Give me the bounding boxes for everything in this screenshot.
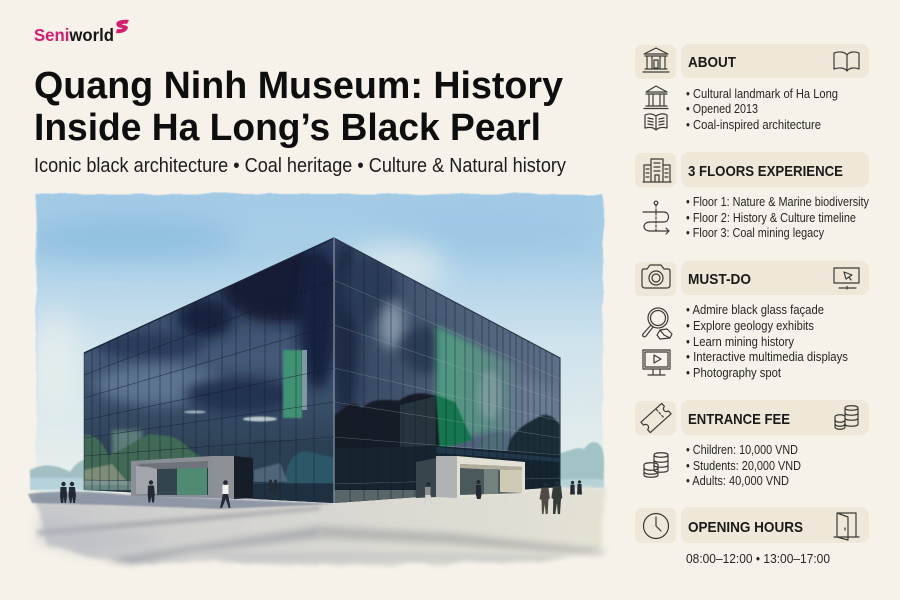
building shadow on left plaza <box>28 491 334 509</box>
floors bullets: • Floor 2: History & Culture timeline <box>686 211 856 225</box>
plaza strip three <box>320 526 607 555</box>
about header: ABOUT <box>688 54 736 71</box>
fee bullets: • Children: 10,000 VND <box>686 443 798 457</box>
panel: entrance fee <box>635 400 869 488</box>
people on the plaza <box>60 480 582 514</box>
about icon tile: museum <box>635 45 676 79</box>
must-do bullets: • Interactive multimedia displays <box>686 350 848 364</box>
must-do header: MUST-DO <box>688 271 751 288</box>
hours header: OPENING HOURS <box>688 519 803 536</box>
panel: must-do <box>635 261 869 380</box>
subtitle: Iconic black architecture • Coal heritage • Culture & Natural history <box>34 155 566 177</box>
plaza ground <box>28 488 607 566</box>
distant hills and water <box>30 442 604 490</box>
title: Inside Ha Long’s Black Pearl <box>34 107 541 149</box>
title: Quang Ninh Museum: History <box>34 65 563 107</box>
must-do bullets: • Explore geology exhibits <box>686 319 814 333</box>
hours icon tile: clock <box>635 508 676 543</box>
floors header: 3 FLOORS EXPERIENCE <box>688 163 843 180</box>
icon: open book <box>645 114 667 130</box>
floors bullets: • Floor 1: Nature & Marine biodiversity <box>686 195 870 209</box>
about bullets <box>686 87 838 132</box>
sky wash <box>20 194 603 494</box>
left entrance pavilion <box>131 456 253 499</box>
corner frame <box>84 238 334 353</box>
building right facade <box>331 238 560 505</box>
icon: coin stacks <box>644 453 668 477</box>
must-do bullets: • Photography spot <box>686 366 781 380</box>
icon: magnifier over rock <box>643 308 672 339</box>
floors bullets <box>686 195 870 240</box>
hours text: 08:00–12:00 • 13:00–17:00 <box>686 551 830 566</box>
about bullets: • Opened 2013 <box>686 102 758 116</box>
panel: 3 floors experience <box>635 152 870 240</box>
fee icon tile: ticket <box>635 401 676 435</box>
logo: Seniworld <box>34 20 129 45</box>
watercolor illustration: museum <box>20 194 607 566</box>
floors bullets: • Floor 3: Coal mining legacy <box>686 226 825 240</box>
fee bullets: • Adults: 40,000 VND <box>686 474 789 488</box>
panel: opening hours <box>635 507 869 566</box>
must-do bullets <box>686 303 848 380</box>
must-do bullets: • Admire black glass façade <box>686 303 824 317</box>
floors icon tile: building <box>635 153 676 187</box>
fee header <box>681 400 869 435</box>
icon: multimedia monitor <box>643 350 670 375</box>
about bullets: • Cultural landmark of Ha Long <box>686 87 838 101</box>
plaza strip one <box>37 506 320 536</box>
must-do header <box>681 261 869 295</box>
plaza strip two <box>100 526 320 565</box>
fee bullets <box>686 443 801 488</box>
must-do icon tile: camera <box>635 262 676 296</box>
floors header <box>681 152 869 187</box>
must-do bullets: • Learn mining history <box>686 335 795 349</box>
right entrance pavilion <box>416 456 525 498</box>
building left facade <box>84 238 340 506</box>
panel: about <box>635 44 869 132</box>
icon: route path <box>643 201 669 234</box>
glass curtain wall grid <box>84 247 552 502</box>
fee header: ENTRANCE FEE <box>688 411 790 428</box>
hours header <box>681 507 869 543</box>
title <box>34 65 563 149</box>
logo: Seniworld: Seniworld <box>34 25 114 45</box>
fee bullets: • Students: 20,000 VND <box>686 459 801 473</box>
about header <box>681 44 869 78</box>
icon: museum <box>644 86 668 108</box>
about bullets: • Coal-inspired architecture <box>686 118 821 132</box>
